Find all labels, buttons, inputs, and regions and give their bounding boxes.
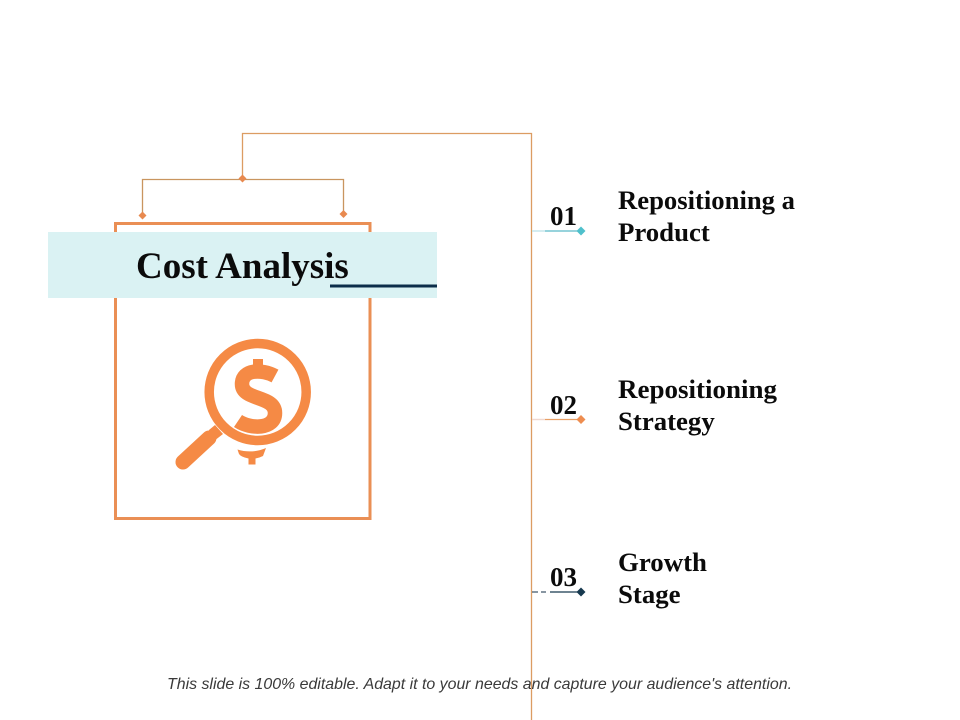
label 01: Repositioning a (618, 185, 795, 215)
icon: magnifying glass with dollar sign (183, 344, 306, 464)
number 02: 02 (550, 390, 577, 420)
title: Cost Analysis (136, 246, 349, 287)
label 02: Repositioning (618, 374, 778, 404)
title banner (48, 232, 437, 298)
item 01: Product (618, 217, 710, 247)
footer note: This slide is 100% editable. Adapt it to your needs and capture your audience's attention. (167, 676, 792, 693)
connector: main orange vertical line and top branch (242, 134, 532, 720)
item 03 (532, 547, 707, 609)
number 01: 01 (550, 201, 577, 231)
connector: bracket with diamonds (138, 174, 348, 220)
panel: orange square frame (116, 224, 370, 518)
number 03: 03 (550, 562, 577, 592)
label 03: Growth (618, 547, 707, 577)
item 02 (532, 374, 778, 436)
item 03: Stage (618, 579, 681, 609)
item 01 (532, 185, 795, 247)
item 02: Strategy (618, 406, 715, 436)
